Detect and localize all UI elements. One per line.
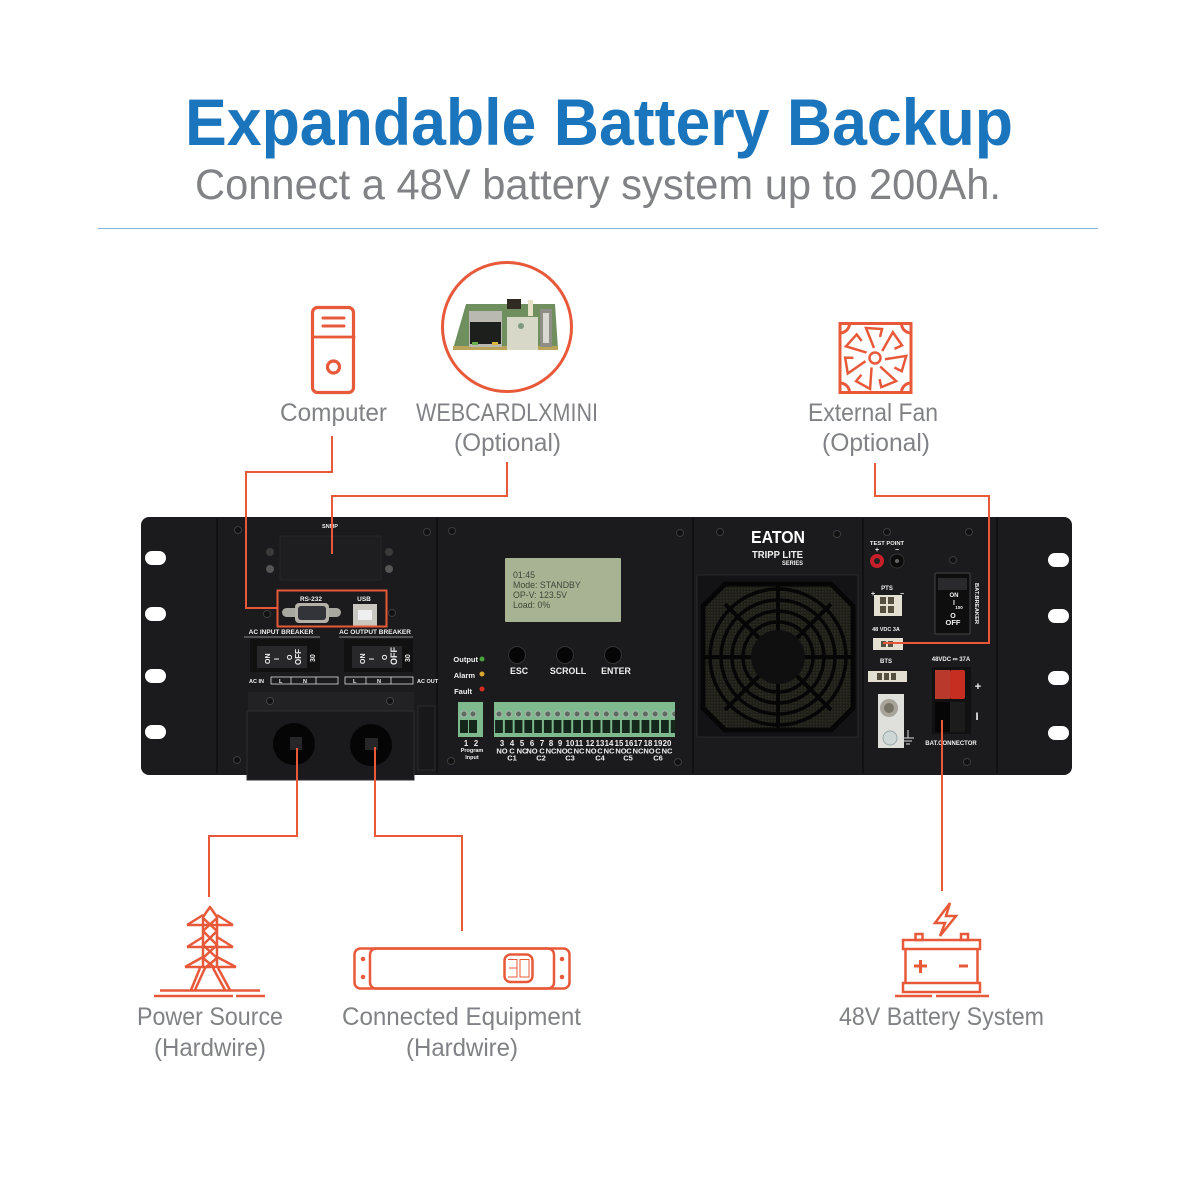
terminal labels: 6 xyxy=(530,739,535,748)
terminal labels: C1 xyxy=(507,754,517,762)
RS-232 and USB ports xyxy=(282,596,377,626)
LCD display: OP-V: 123.5V xyxy=(513,590,567,600)
terminal labels: C xyxy=(539,746,545,756)
battery breaker switch: ON xyxy=(950,593,958,599)
terminal labels: 9 xyxy=(558,739,563,748)
icon: WEBCARDLXMINI circular photo xyxy=(442,262,572,392)
AC breakers: OFF xyxy=(294,649,303,665)
connector: power source to input xyxy=(209,748,297,897)
AC breakers: ON xyxy=(360,654,367,664)
label: external fan: (Optional) xyxy=(822,429,930,457)
label: power source xyxy=(137,1003,283,1062)
icon: connected equipment xyxy=(354,948,570,988)
AC terminal labels: L xyxy=(279,679,283,685)
test points: − xyxy=(895,547,899,554)
terminal labels: 19 xyxy=(654,739,663,748)
battery connector: I xyxy=(975,711,979,723)
connector: computer to RS-232 xyxy=(246,436,332,608)
PTS, 48 VDC and BTS connectors: 48 VDC 3A xyxy=(872,627,900,633)
battery breaker switch: I xyxy=(953,600,955,607)
test points: + xyxy=(875,547,879,554)
label: power source: Power Source xyxy=(137,1003,283,1031)
RS-232 and USB ports: RS-232 xyxy=(300,596,322,603)
terminal labels: 8 xyxy=(549,739,554,748)
AC terminal labels xyxy=(249,677,439,685)
terminal labels: Program xyxy=(461,748,483,754)
LCD display xyxy=(505,558,621,622)
terminal labels: C2 xyxy=(536,754,546,762)
terminal labels: C xyxy=(597,746,603,756)
terminal blocks xyxy=(458,702,675,737)
terminal labels: 16 xyxy=(625,739,634,748)
status LEDs: Alarm xyxy=(454,671,475,680)
terminal labels: 12 xyxy=(586,739,595,748)
control buttons: ESC xyxy=(510,666,529,676)
terminal labels: Input xyxy=(465,755,479,761)
terminal labels: C xyxy=(567,746,573,756)
Eaton Tripp Lite logo: SERIES xyxy=(782,561,803,567)
icon: power source tower xyxy=(154,907,265,996)
label: WEBCARDLXMINI: (Optional) xyxy=(454,429,561,457)
terminal labels: NC xyxy=(574,746,585,756)
AC breakers: I xyxy=(274,658,281,660)
terminal labels: 1 xyxy=(464,739,469,748)
callout: RS-232 and USB highlight xyxy=(278,590,386,626)
label: connected equipment: (Hardwire) xyxy=(406,1034,518,1062)
battery breaker switch: OFF xyxy=(946,618,961,627)
battery breaker switch: 100 xyxy=(955,605,963,610)
status LEDs: Output xyxy=(453,655,478,664)
terminal labels: 13 xyxy=(596,739,605,748)
SNMP slot xyxy=(266,524,393,580)
terminal labels: C4 xyxy=(595,754,606,762)
AC terminal labels: L xyxy=(353,679,357,685)
cooling fan grill xyxy=(697,575,858,737)
terminal labels: 20 xyxy=(663,739,672,748)
battery breaker switch xyxy=(935,573,979,634)
terminal labels: 7 xyxy=(540,739,544,748)
control buttons: ENTER xyxy=(601,666,632,676)
icon: external fan xyxy=(840,324,911,392)
AC breakers: AC INPUT BREAKER xyxy=(249,629,314,636)
device: rack-mount panel xyxy=(141,517,1072,780)
terminal labels: NO xyxy=(615,746,627,756)
terminal labels: NO xyxy=(556,746,568,756)
connector: battery connector to battery system xyxy=(941,720,943,891)
AC terminal labels: N xyxy=(303,679,307,685)
label: external fan xyxy=(808,399,938,457)
PTS, 48 VDC and BTS connectors: BTS xyxy=(880,659,892,665)
AC breakers xyxy=(244,629,413,672)
AC terminal labels: N xyxy=(377,679,381,685)
battery connector: 48VDC ⎓ 37A xyxy=(932,657,971,663)
status LEDs: Fault xyxy=(454,687,472,696)
AC breakers: O xyxy=(287,654,294,660)
AC breakers: OFF xyxy=(389,647,399,665)
subtitle: Connect a 48V battery system up to 200Ah. xyxy=(195,161,1001,209)
mounting holes xyxy=(145,551,1069,740)
terminal labels: NO xyxy=(496,746,508,756)
terminal labels: 17 xyxy=(634,739,642,748)
connector: WEBCARDLXMINI to SNMP slot xyxy=(332,462,507,554)
AC breakers: ON xyxy=(265,654,272,664)
terminal labels: C5 xyxy=(623,754,633,762)
terminal labels: NO xyxy=(585,746,597,756)
terminal labels: C xyxy=(655,746,661,756)
title: Expandable Battery Backup xyxy=(185,85,1013,159)
SNMP slot: SNMP xyxy=(322,524,338,530)
battery breaker switch: BAT.BREAKER xyxy=(973,583,979,625)
label: 48V battery system: 48V Battery System xyxy=(839,1003,1044,1031)
test points xyxy=(870,541,905,568)
battery breaker switch: O xyxy=(950,613,956,620)
label: WEBCARDLXMINI xyxy=(416,399,598,457)
terminal labels: NC xyxy=(546,746,557,756)
battery connector: BAT.CONNECTOR xyxy=(925,741,977,747)
terminal labels: 10 xyxy=(566,739,575,748)
terminal labels: 18 xyxy=(644,739,653,748)
connector: output to connected equipment xyxy=(375,747,462,931)
LCD display: Load: 0% xyxy=(513,600,550,610)
terminal labels: NO xyxy=(643,746,655,756)
Eaton Tripp Lite logo xyxy=(751,527,805,567)
control buttons: SCROLL xyxy=(550,666,587,676)
terminal labels: 2 xyxy=(474,739,479,748)
terminal labels: 14 xyxy=(605,739,614,748)
terminal labels: 11 xyxy=(575,739,584,748)
AC breakers: I xyxy=(369,658,376,660)
PTS, 48 VDC and BTS connectors xyxy=(868,586,907,682)
PTS, 48 VDC and BTS connectors: − xyxy=(900,591,904,598)
terminal labels: NO xyxy=(526,746,538,756)
Eaton Tripp Lite logo: EATON xyxy=(751,527,805,547)
panel screws xyxy=(234,526,972,766)
status LEDs xyxy=(453,655,484,696)
AC breakers: O xyxy=(382,654,389,660)
PTS, 48 VDC and BTS connectors: + xyxy=(871,591,875,598)
terminal labels: C3 xyxy=(565,754,575,762)
ground lug xyxy=(878,694,914,748)
AC terminal labels: AC OUT xyxy=(417,679,439,685)
battery connector: + xyxy=(975,681,981,693)
LCD display: Mode: STANDBY xyxy=(513,580,581,590)
label: computer: Computer xyxy=(280,399,387,427)
label: WEBCARDLXMINI: WEBCARDLXMINI xyxy=(416,399,598,427)
label: power source: (Hardwire) xyxy=(154,1034,266,1062)
PTS, 48 VDC and BTS connectors: PTS xyxy=(881,586,893,592)
terminal labels: NC xyxy=(662,746,673,756)
terminal labels: 15 xyxy=(615,739,624,748)
connector: external fan to 48 VDC xyxy=(875,463,989,643)
AC breakers: 30 xyxy=(310,654,317,662)
terminal labels: C xyxy=(626,746,632,756)
Eaton Tripp Lite logo: TRIPP LITE xyxy=(752,550,803,561)
terminal labels: 4 xyxy=(510,739,515,748)
chassis body xyxy=(141,517,1072,775)
label: connected equipment xyxy=(342,1003,581,1062)
terminal labels: NC xyxy=(633,746,644,756)
icon: computer xyxy=(312,308,354,392)
icon: 48V battery xyxy=(895,903,989,996)
test points: TEST POINT xyxy=(870,541,905,547)
control buttons xyxy=(508,646,632,676)
battery connector xyxy=(925,657,981,747)
terminal labels xyxy=(461,739,673,762)
LCD display: 01:45 xyxy=(513,570,535,580)
label: external fan: External Fan xyxy=(808,399,938,427)
terminal labels: NC xyxy=(604,746,615,756)
AC terminal labels: AC IN xyxy=(249,679,264,685)
terminal labels: 3 xyxy=(500,739,505,748)
label: connected equipment: Connected Equipment xyxy=(342,1003,581,1031)
terminal labels: 5 xyxy=(520,739,525,748)
terminal labels: C6 xyxy=(653,754,663,762)
hardwire box xyxy=(247,692,435,780)
terminal labels: NC xyxy=(517,746,528,756)
AC breakers: 30 xyxy=(405,654,412,662)
terminal labels: C xyxy=(509,746,515,756)
AC breakers: AC OUTPUT BREAKER xyxy=(339,629,411,636)
RS-232 and USB ports: USB xyxy=(357,596,371,603)
